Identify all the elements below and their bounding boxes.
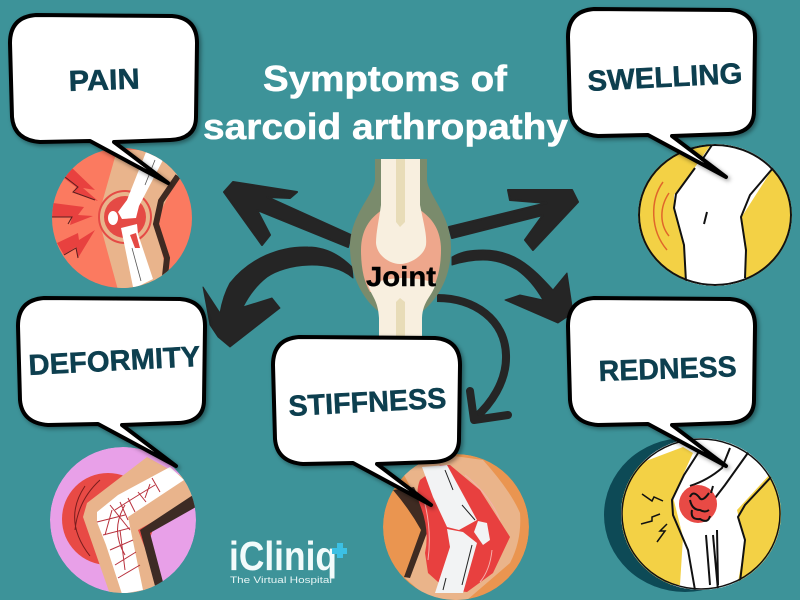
illustration: pain knee xyxy=(50,146,195,291)
illustration: deformity knee xyxy=(50,447,197,600)
logo plus icon xyxy=(332,543,347,558)
synovial fluid xyxy=(361,210,441,292)
callout: deformity xyxy=(18,298,205,466)
title: sarcoid arthropathy xyxy=(203,106,568,147)
callout: pain xyxy=(10,15,197,183)
logo: iCliniq: iCliniq xyxy=(229,533,337,579)
lower bone xyxy=(368,278,436,340)
title: Symptoms of xyxy=(263,58,508,99)
illustration: redness knee xyxy=(604,438,785,592)
arrow: to swelling xyxy=(449,190,578,250)
arrow: to deformity xyxy=(203,247,353,347)
joint label: Joint xyxy=(366,261,436,292)
callout: redness: REDNESS xyxy=(598,351,737,388)
callout: swelling xyxy=(568,9,755,177)
joint capsule xyxy=(350,159,451,311)
arrow: to pain xyxy=(224,182,351,247)
callout: stiffness xyxy=(273,337,460,505)
callout: swelling: SWELLING xyxy=(587,58,743,98)
title xyxy=(203,58,568,147)
callout: redness xyxy=(568,298,755,466)
arrow: to stiffness xyxy=(437,298,508,420)
callout: pain: PAIN xyxy=(68,64,140,98)
illustration: swelling knee xyxy=(638,143,792,290)
logo: iCliniq: The Virtual Hospital xyxy=(230,575,332,586)
illustration: stiffness knee xyxy=(383,452,529,600)
callout: stiffness: STIFFNESS xyxy=(288,383,447,423)
joint diagram xyxy=(350,159,451,340)
arrow: to redness xyxy=(452,250,573,323)
upper bone xyxy=(376,159,426,264)
bone marrow xyxy=(396,159,405,340)
callout: deformity: DEFORMITY xyxy=(28,341,201,382)
